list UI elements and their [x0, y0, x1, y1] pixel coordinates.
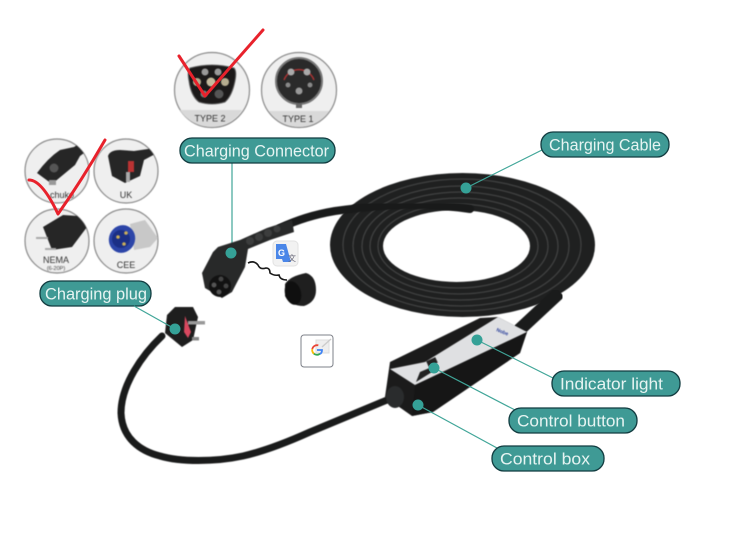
icon: red check mark over plugs	[29, 140, 105, 214]
icon: translate badge: 文	[288, 253, 296, 263]
icon: type 1 connector	[262, 52, 336, 129]
charging plug head	[165, 307, 205, 347]
icon: NEMA plug	[25, 209, 89, 273]
icon: translate badge	[273, 241, 298, 266]
icon: translate badge: G	[278, 248, 285, 258]
label: control button	[428, 362, 637, 433]
icon: CEE plug	[94, 209, 158, 273]
icon: schuko plug: chuko	[50, 190, 74, 200]
infographic: EV charging cable diagram	[24, 28, 681, 472]
icon: UK plug	[94, 139, 158, 203]
control box: Nobe	[495, 327, 509, 338]
label: control box: Control box	[500, 450, 591, 468]
connector tether wire	[248, 262, 287, 280]
charging connector handle	[202, 220, 294, 298]
power cord	[121, 336, 387, 460]
icon: type 1 connector: TYPE 1	[282, 114, 314, 124]
cable to control box	[517, 292, 560, 332]
connector cable leading to coil	[280, 205, 470, 228]
label: indicator light: Indicator light	[560, 374, 663, 394]
label: charging cable	[460, 132, 669, 194]
icon: CEE plug: CEE	[117, 260, 135, 270]
icon: type 2 connector: TYPE 2	[194, 114, 226, 124]
leader: charging plug	[134, 306, 180, 334]
connector leader dot	[226, 248, 236, 258]
label: charging cable: Charging Cable	[549, 136, 661, 154]
label: indicator light	[472, 334, 680, 396]
connector dust cap	[282, 273, 316, 307]
icon: NEMA plug: (6-20P)	[47, 266, 65, 272]
label: control box	[412, 400, 604, 471]
icon: type 2 connector	[174, 52, 250, 130]
control box	[385, 317, 527, 416]
icon: red check mark over type 2	[179, 30, 263, 96]
label: charging connector	[180, 138, 335, 252]
label: charging plug: Charging plug	[45, 284, 147, 304]
icon: NEMA plug: NEMA	[43, 255, 69, 265]
label: control button: Control button	[517, 412, 625, 430]
icon: schuko plug	[25, 139, 89, 203]
coiled charging cable	[330, 173, 595, 317]
icon: google search badge	[301, 335, 333, 367]
label: charging connector: Charging Connector	[184, 142, 329, 160]
icon: UK plug: UK	[120, 190, 132, 200]
